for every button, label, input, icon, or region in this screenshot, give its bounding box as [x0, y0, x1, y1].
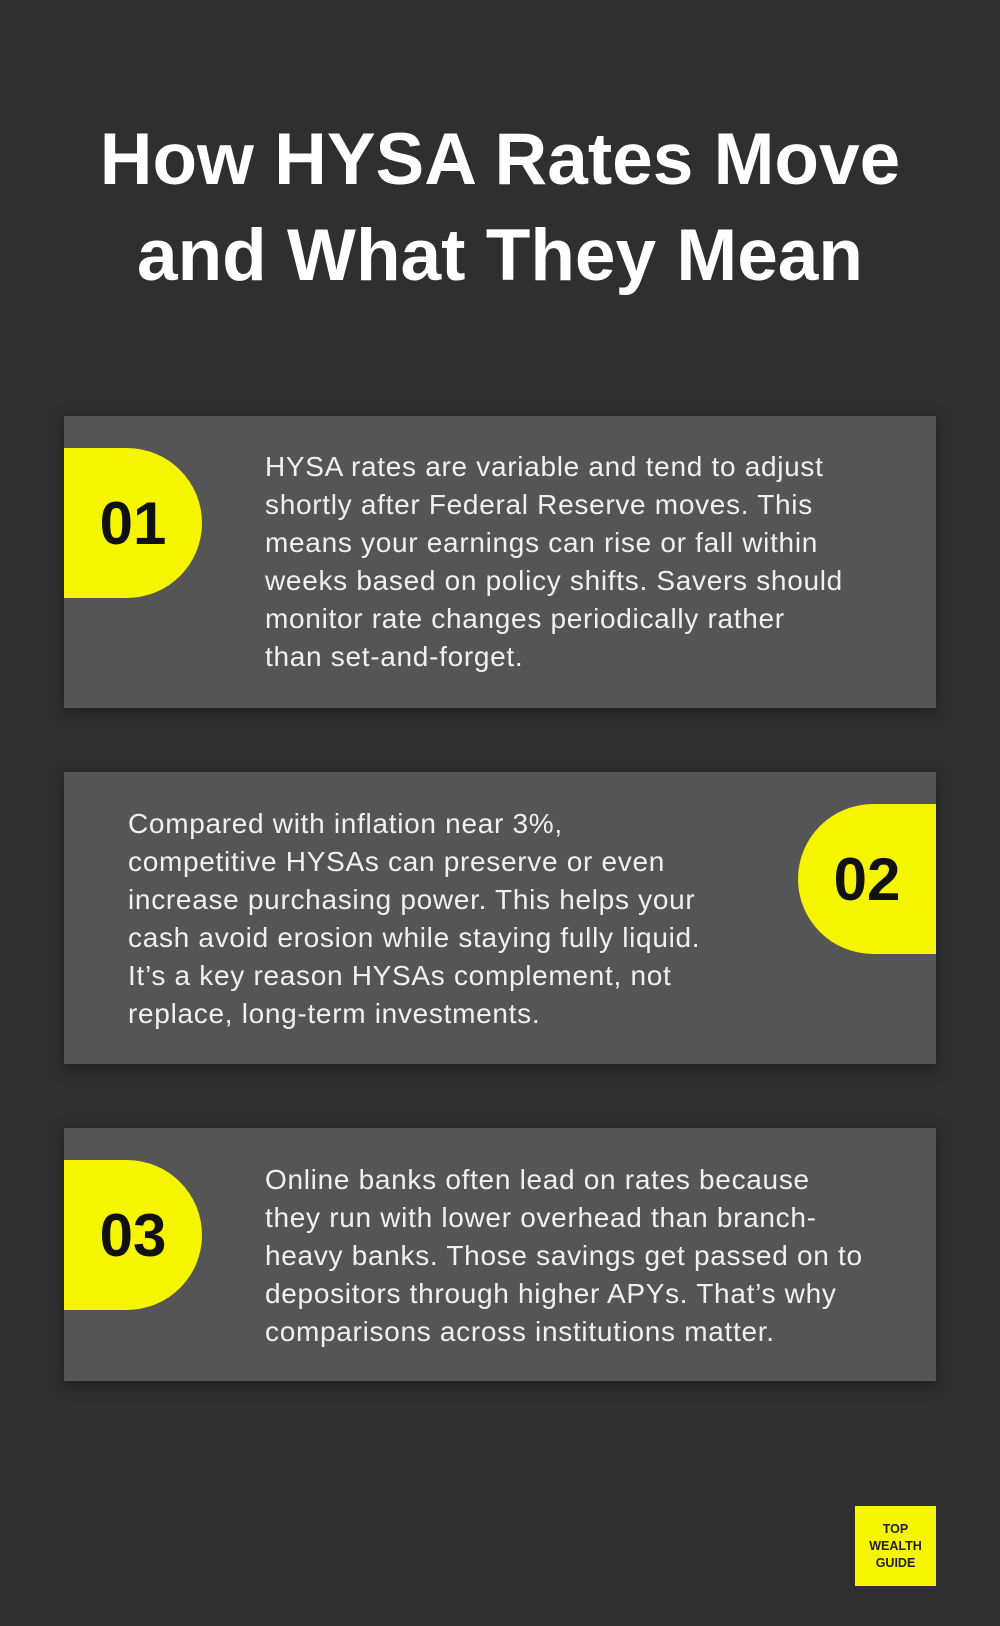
logo: GUIDE	[876, 1556, 915, 1570]
text block 02: increase purchasing power. This helps your	[128, 884, 695, 915]
text block 02: replace, long-term investments.	[128, 998, 540, 1029]
text block 01: means your earnings can rise or fall within	[265, 527, 818, 558]
text block 01: monitor rate changes periodically rather	[265, 603, 785, 634]
text block 02	[128, 808, 700, 1029]
badge 01: 01	[100, 490, 166, 556]
title	[100, 119, 900, 296]
logo	[855, 1506, 936, 1586]
text block 01: shortly after Federal Reserve moves. This	[265, 489, 813, 520]
title: How HYSA Rates Move	[100, 119, 900, 200]
badge 03	[64, 1160, 202, 1310]
badge 02: 02	[834, 846, 900, 912]
badge 03: 03	[100, 1202, 166, 1268]
panel: card 03	[64, 1128, 936, 1381]
text block 01	[265, 451, 843, 672]
text block 03: comparisons across institutions matter.	[265, 1316, 775, 1347]
badge 02	[798, 804, 936, 954]
text block 03: heavy banks. Those savings get passed on to	[265, 1240, 863, 1271]
text block 02: It’s a key reason HYSAs complement, not	[128, 960, 671, 991]
text block 03: Online banks often lead on rates because	[265, 1164, 810, 1195]
text block 01: than set-and-forget.	[265, 641, 523, 672]
logo: TOP	[883, 1522, 908, 1536]
text block 03: they run with lower overhead than branch-	[265, 1202, 817, 1233]
text block 02: competitive HYSAs can preserve or even	[128, 846, 665, 877]
badge 01	[64, 448, 202, 598]
text block 02: Compared with inflation near 3%,	[128, 808, 563, 839]
title: and What They Mean	[137, 215, 863, 296]
text block 03	[265, 1164, 863, 1347]
text block 03: depositors through higher APYs. That’s why	[265, 1278, 837, 1309]
panel: card 01	[64, 416, 936, 708]
text block 02: cash avoid erosion while staying fully liquid.	[128, 922, 700, 953]
text block 01: HYSA rates are variable and tend to adjust	[265, 451, 824, 482]
logo: WEALTH	[869, 1538, 922, 1552]
panel: card 02	[64, 772, 936, 1064]
text block 01: weeks based on policy shifts. Savers should	[265, 565, 843, 596]
